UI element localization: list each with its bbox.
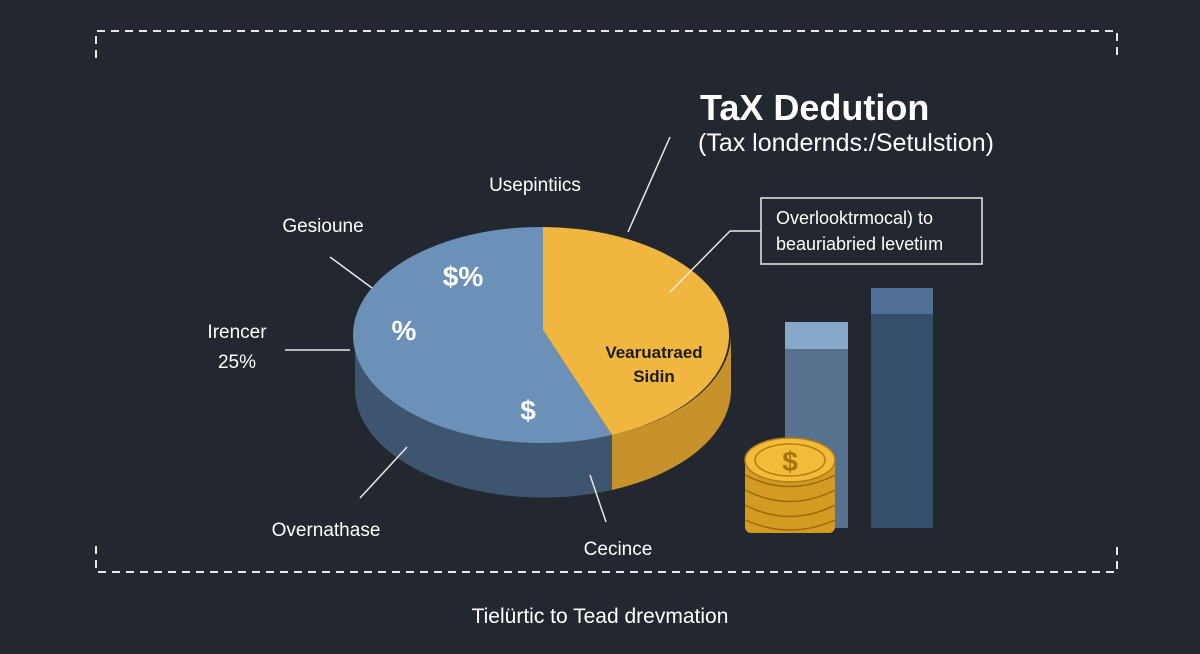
pie chart: Sidin [633,367,675,386]
callout box [761,198,982,264]
pie chart: $% [443,261,483,292]
pie chart: % [392,315,417,346]
pie chart: $ [520,395,536,426]
bar chart [785,288,933,528]
text: Irencer [207,322,267,343]
callout box: beauriabried levetiım [776,234,943,254]
text: Gesioune [282,216,364,237]
leader lines [285,137,761,522]
pie chart: Vearuatraed [605,343,703,362]
callout box: Overlooktrmocal) to [776,208,933,228]
footer caption: Tielürtic to Tead drevmation [472,605,728,628]
pie chart [353,227,731,498]
text: Overnathase [272,520,380,541]
title: TaX Dedution [700,87,929,128]
icon: coin stack: $ [782,446,798,477]
icon: coin stack [745,438,835,533]
subtitle: (Tax londernds:/Setulstion) [698,129,994,157]
labels: Usepintiics [489,175,581,196]
text: 25% [218,352,256,373]
text: Cecince [584,539,652,560]
